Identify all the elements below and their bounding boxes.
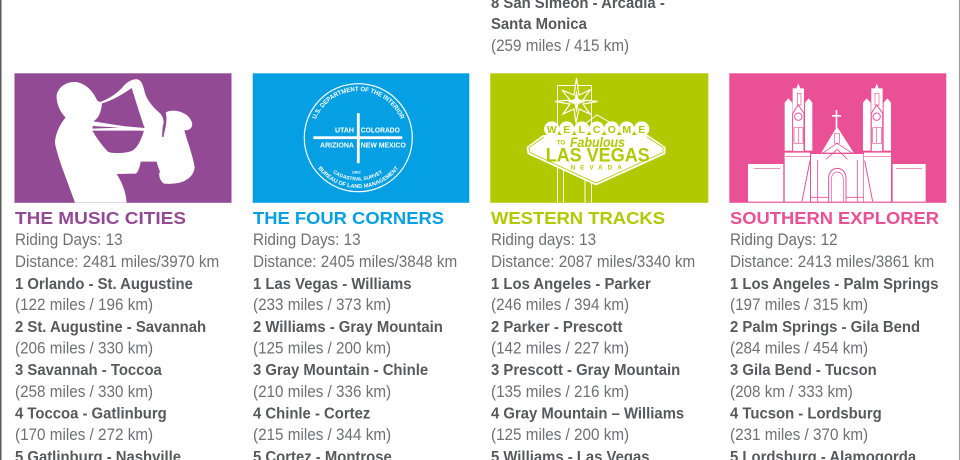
route list xyxy=(253,232,457,460)
icon: welcome to Las Vegas sign: NEVADA xyxy=(571,164,622,172)
route list: (125 miles / 200 km) xyxy=(253,340,391,358)
route list: Distance: 2413 miles/3861 km xyxy=(730,254,934,271)
route list: Distance: 2405 miles/3848 km xyxy=(253,254,457,271)
icon: four corners survey marker: 1962 xyxy=(352,170,362,175)
heading: THE MUSIC CITIES xyxy=(15,208,186,228)
text block: end of column 3 above the panels xyxy=(491,0,665,55)
route list: Distance: 2481 miles/3970 km xyxy=(15,254,219,271)
route list: (233 miles / 373 km) xyxy=(253,297,391,314)
route list: Riding days: 13 xyxy=(491,232,596,249)
column: western tracks xyxy=(491,208,695,460)
route list: 4 Chinle - Cortez xyxy=(253,405,371,423)
route list: (210 miles / 336 km) xyxy=(253,384,391,401)
icon: welcome to Las Vegas sign: E xyxy=(638,124,645,136)
text block: end of column 3 above the panels: (259 miles / 415 km) xyxy=(491,38,629,55)
route list: (215 miles / 344 km) xyxy=(253,427,391,444)
route list: 1 Los Angeles - Palm Springs xyxy=(730,276,938,293)
icon: welcome to Las Vegas sign: L xyxy=(578,124,585,136)
route list: 1 Orlando - St. Augustine xyxy=(15,276,193,293)
route list: 3 Gila Bend - Tucson xyxy=(730,362,877,379)
route list: 2 Parker - Prescott xyxy=(491,319,622,336)
route list: 2 St. Augustine - Savannah xyxy=(15,319,206,336)
panel: western tracks image xyxy=(490,73,708,203)
icon: four corners survey marker xyxy=(304,83,413,192)
icon: welcome to Las Vegas sign: E xyxy=(563,124,570,136)
route list: (206 miles / 330 km) xyxy=(15,340,153,358)
route list: 3 Gray Mountain - Chinle xyxy=(253,362,429,379)
icon: welcome to Las Vegas sign: C xyxy=(593,124,601,136)
column: the music cities xyxy=(15,208,219,460)
panel: southern explorer image xyxy=(729,73,946,203)
route list: (208 km / 333 km) xyxy=(730,384,853,401)
route list: Distance: 2087 miles/3340 km xyxy=(491,254,695,271)
icon: four corners survey marker: UTAH xyxy=(335,126,354,135)
route list: Riding Days: 13 xyxy=(253,232,361,249)
heading: THE FOUR CORNERS xyxy=(253,208,444,228)
icon: four corners survey marker: BUREAU OF LAND MANAGEMENT xyxy=(318,166,398,188)
icon: welcome to Las Vegas sign: LAS VEGAS xyxy=(546,145,650,167)
icon: saxophone player xyxy=(55,79,195,203)
route list: Riding Days: 12 xyxy=(730,232,838,249)
route list xyxy=(15,232,219,460)
icon: four corners survey marker: NEW MEXICO xyxy=(361,141,406,150)
route list xyxy=(730,232,938,460)
heading: WESTERN TRACKS xyxy=(491,208,665,228)
column: southern explorer xyxy=(730,208,939,460)
icon: welcome to Las Vegas sign: Fabulous xyxy=(570,134,625,150)
icon: four corners survey marker: CADASTRAL SURVEY xyxy=(334,170,382,180)
route list: 4 Toccoa - Gatlinburg xyxy=(15,405,167,423)
column: the four corners xyxy=(253,208,457,460)
route list: (246 miles / 394 km) xyxy=(491,297,629,314)
route list xyxy=(491,232,695,460)
panel: the four corners image xyxy=(252,73,470,203)
route list: (258 miles / 330 km) xyxy=(15,384,153,401)
route list: 2 Williams - Gray Mountain xyxy=(253,319,443,336)
icon: welcome to Las Vegas sign xyxy=(526,78,666,202)
route list: (122 miles / 196 km) xyxy=(15,297,153,314)
route list: (284 miles / 454 km) xyxy=(730,340,868,358)
icon: welcome to Las Vegas sign: O xyxy=(608,124,616,136)
route list: (135 miles / 216 km) xyxy=(491,384,629,401)
panel: the music cities image xyxy=(14,73,232,203)
route list: 1 Los Angeles - Parker xyxy=(491,276,651,293)
icon: welcome to Las Vegas sign: TO xyxy=(557,140,565,146)
route list: Riding Days: 13 xyxy=(15,232,123,249)
icon: four corners survey marker: COLORADO xyxy=(361,126,400,135)
heading: SOUTHERN EXPLORER xyxy=(730,208,939,228)
route list: 2 Palm Springs - Gila Bend xyxy=(730,319,920,336)
icon: welcome to Las Vegas sign: M xyxy=(622,124,631,136)
text block: end of column 3 above the panels: Santa Monica xyxy=(491,16,587,33)
route list: 4 Tucson - Lordsburg xyxy=(730,405,882,423)
route list: 3 Prescott - Gray Mountain xyxy=(491,362,680,379)
route list: 3 Savannah - Toccoa xyxy=(15,362,162,379)
icon: four corners survey marker: ARIZIONA xyxy=(320,141,354,150)
route list: 1 Las Vegas - Williams xyxy=(253,276,412,293)
route list: (197 miles / 315 km) xyxy=(730,297,868,314)
route list: 4 Gray Mountain – Williams xyxy=(491,405,684,423)
icon: four corners survey marker: U.S. DEPARTMENT OF THE INTERIOR xyxy=(312,86,404,120)
icon: welcome to Las Vegas sign: W xyxy=(547,124,557,136)
route list: (170 miles / 272 km) xyxy=(15,427,153,444)
route list: (142 miles / 227 km) xyxy=(491,340,629,358)
icon: church xyxy=(748,83,926,202)
route list: (125 miles / 200 km) xyxy=(491,427,629,444)
route list: (231 miles / 370 km) xyxy=(730,427,868,444)
